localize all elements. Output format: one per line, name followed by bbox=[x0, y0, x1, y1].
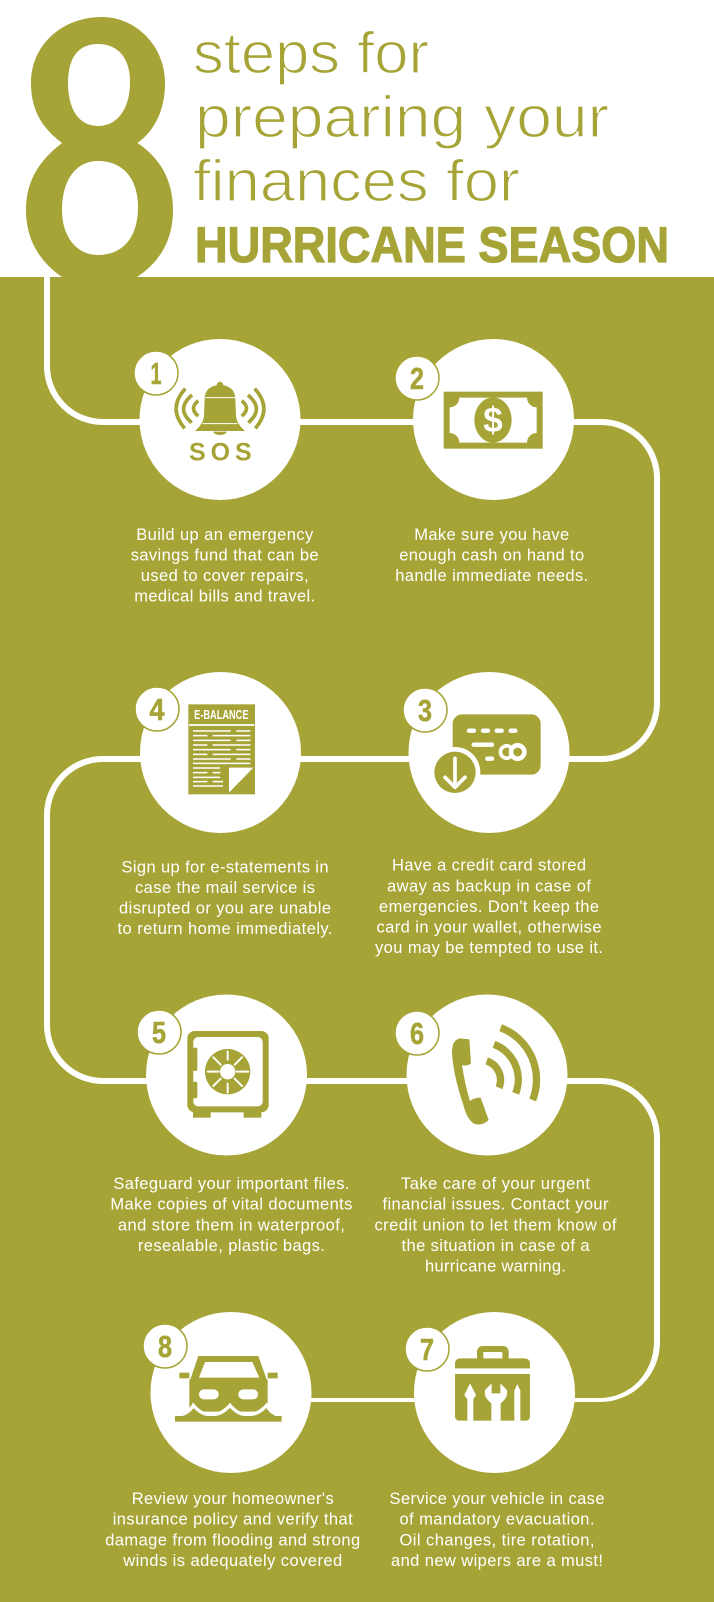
icon: banknote: $ bbox=[483, 401, 503, 440]
badge 7 bbox=[405, 1327, 449, 1371]
text: step 5: Make copies of vital documents bbox=[110, 1196, 352, 1214]
badge 1 bbox=[134, 351, 178, 395]
step 1 bbox=[134, 339, 300, 500]
text: step 8: Review your homeowner's bbox=[132, 1490, 334, 1508]
icon: flooded car bbox=[175, 1356, 282, 1422]
step 8 bbox=[143, 1312, 312, 1473]
text: step 6 bbox=[374, 1175, 617, 1276]
badge 1: 1 bbox=[150, 356, 162, 391]
title bbox=[193, 21, 669, 273]
text: step 3 bbox=[375, 857, 603, 957]
icon: banknote bbox=[444, 392, 543, 449]
text: step 8: winds is adequately covered bbox=[122, 1552, 342, 1570]
step 3 bbox=[403, 672, 570, 833]
text: step 6: hurricane warning. bbox=[425, 1258, 566, 1276]
badge 5: 5 bbox=[152, 1015, 166, 1050]
text: step 7: of mandatory evacuation. bbox=[400, 1511, 594, 1529]
text: step 7 bbox=[390, 1490, 604, 1570]
badge 7: 7 bbox=[420, 1332, 434, 1367]
text: step 7: Service your vehicle in case bbox=[390, 1490, 604, 1508]
text: step 6: financial issues. Contact your bbox=[382, 1196, 609, 1214]
text: step 1: used to cover repairs, bbox=[141, 567, 309, 585]
icon: e-balance statement: E-BALANCE bbox=[194, 708, 248, 722]
text: step 4 bbox=[118, 858, 332, 938]
text: step 7: and new wipers are a must! bbox=[391, 1552, 603, 1570]
circle 2 bbox=[413, 339, 574, 500]
text: step 3: Have a credit card stored bbox=[392, 857, 586, 875]
icon: credit card with download arrow bbox=[430, 714, 541, 798]
step 7 bbox=[405, 1312, 575, 1473]
badge 2 bbox=[395, 356, 439, 400]
text: step 5: Safeguard your important files. bbox=[113, 1175, 349, 1193]
badge 5 bbox=[137, 1010, 181, 1054]
badge 6 bbox=[395, 1011, 439, 1055]
circle 7 bbox=[414, 1312, 575, 1473]
circle 4 bbox=[140, 672, 301, 833]
text: step 2: enough cash on hand to bbox=[399, 546, 584, 564]
badge 2: 2 bbox=[410, 361, 424, 396]
badge 8: 8 bbox=[158, 1329, 172, 1364]
icon: SOS bell: SOS bbox=[189, 439, 252, 467]
title: preparing your bbox=[195, 85, 609, 150]
text: step 2: Make sure you have bbox=[414, 526, 569, 544]
circle 6 bbox=[406, 994, 568, 1156]
text: step 1: Build up an emergency bbox=[136, 526, 314, 544]
text: step 4: disrupted or you are unable bbox=[119, 900, 331, 918]
text: step 4: case the mail service is bbox=[135, 879, 315, 897]
text: step 6: the situation in case of a bbox=[402, 1237, 590, 1255]
icon: SOS bell bbox=[176, 382, 264, 467]
text: step 5: and store them in waterproof, bbox=[118, 1216, 345, 1234]
icon: toolbox bbox=[455, 1346, 530, 1421]
circle 5 bbox=[146, 994, 307, 1156]
title: finances for bbox=[193, 149, 520, 214]
text: step 7: Oil changes, tire rotation, bbox=[400, 1531, 594, 1549]
text: step 4: to return home immediately. bbox=[118, 920, 332, 938]
text: step 3: away as backup in case of bbox=[387, 877, 591, 895]
step 2 bbox=[395, 339, 574, 500]
text: step 1 bbox=[131, 526, 319, 606]
text: step 5 bbox=[110, 1175, 352, 1255]
step 5 bbox=[137, 994, 307, 1156]
text: step 4: Sign up for e-statements in bbox=[122, 858, 328, 876]
title: HURRICANE SEASON bbox=[195, 217, 669, 273]
step 6 bbox=[395, 994, 568, 1156]
circle 8 bbox=[150, 1312, 312, 1473]
text: step 3: card in your wallet, otherwise bbox=[376, 918, 602, 936]
badge 4: 4 bbox=[150, 692, 165, 727]
text: step 1: medical bills and travel. bbox=[134, 588, 315, 606]
text: step 6: Take care of your urgent bbox=[401, 1175, 590, 1193]
text: step 8: damage from flooding and strong bbox=[105, 1531, 360, 1549]
text: step 6: credit union to let them know of bbox=[374, 1216, 617, 1234]
title: steps for bbox=[193, 21, 429, 86]
text: step 2: handle immediate needs. bbox=[395, 567, 588, 585]
badge 3: 3 bbox=[418, 693, 432, 728]
badge 4 bbox=[135, 687, 179, 731]
text: step 2 bbox=[395, 526, 588, 585]
text: step 8: insurance policy and verify that bbox=[113, 1511, 353, 1529]
icon: phone with signal waves bbox=[452, 1028, 537, 1124]
text: step 3: emergencies. Don't keep the bbox=[379, 898, 599, 916]
badge 3 bbox=[403, 688, 447, 732]
circle 1 bbox=[140, 339, 300, 500]
text: step 8 bbox=[105, 1490, 360, 1570]
badge 6: 6 bbox=[410, 1016, 424, 1051]
circle 3 bbox=[408, 672, 570, 833]
badge 8 bbox=[143, 1324, 187, 1368]
text: step 1: savings fund that can be bbox=[131, 546, 319, 564]
icon: safe bbox=[187, 1031, 269, 1118]
step 4 bbox=[135, 672, 301, 833]
connector path bbox=[47, 277, 660, 1402]
icon: e-balance statement bbox=[188, 704, 255, 794]
text: step 5: resealable, plastic bags. bbox=[138, 1237, 325, 1255]
text: step 3: you may be tempted to use it. bbox=[375, 939, 603, 957]
